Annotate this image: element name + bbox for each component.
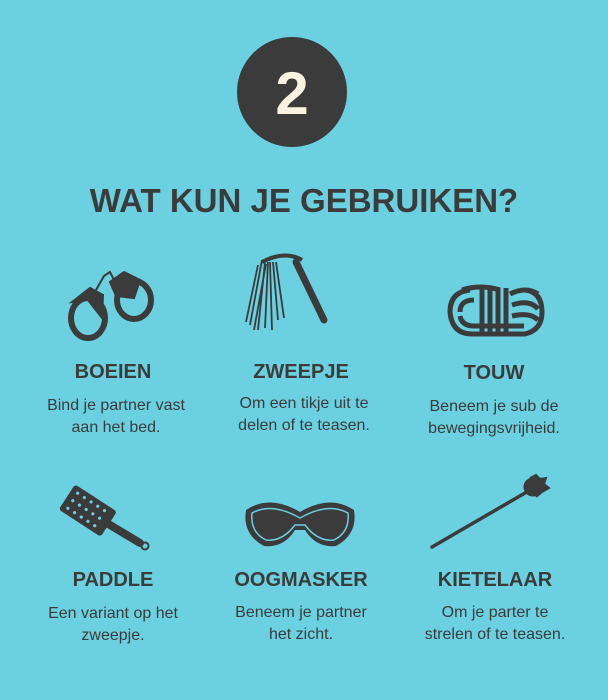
icon: paddle	[59, 484, 149, 550]
heading: BOEIEN: BOEIEN	[75, 361, 151, 383]
text: kietelaar: Om je parter te	[442, 604, 548, 621]
text: touw: Beneem je sub de	[430, 398, 559, 415]
icon: rope	[450, 287, 542, 336]
icon: eye mask	[245, 502, 355, 546]
text: touw: bewegingsvrijheid.	[428, 420, 560, 437]
heading: OOGMASKER: OOGMASKER	[234, 569, 368, 591]
heading: TOUW: TOUW	[464, 362, 524, 384]
heading: PADDLE: PADDLE	[73, 569, 153, 591]
number badge	[237, 37, 347, 147]
heading: KIETELAAR: KIETELAAR	[438, 569, 553, 591]
heading: ZWEEPJE: ZWEEPJE	[253, 361, 349, 383]
text: kietelaar: strelen of te teasen.	[425, 626, 565, 643]
text: boeien: aan het bed.	[72, 419, 160, 436]
text: oogmasker: het zicht.	[269, 626, 333, 643]
text: oogmasker: Beneem je partner	[235, 604, 367, 621]
text: paddle: zweepje.	[81, 627, 145, 644]
number badge: 2	[275, 60, 309, 127]
icon: whip	[246, 255, 324, 330]
icon: tickler	[432, 475, 549, 547]
icon: handcuffs	[71, 272, 151, 338]
text: paddle: Een variant op het	[48, 605, 178, 622]
title: WAT KUN JE GEBRUIKEN?	[90, 182, 518, 219]
text: zweepje: Om een tikje uit te	[240, 395, 369, 412]
text: zweepje: delen of te teasen.	[238, 417, 370, 434]
text: boeien: Bind je partner vast	[47, 397, 185, 414]
